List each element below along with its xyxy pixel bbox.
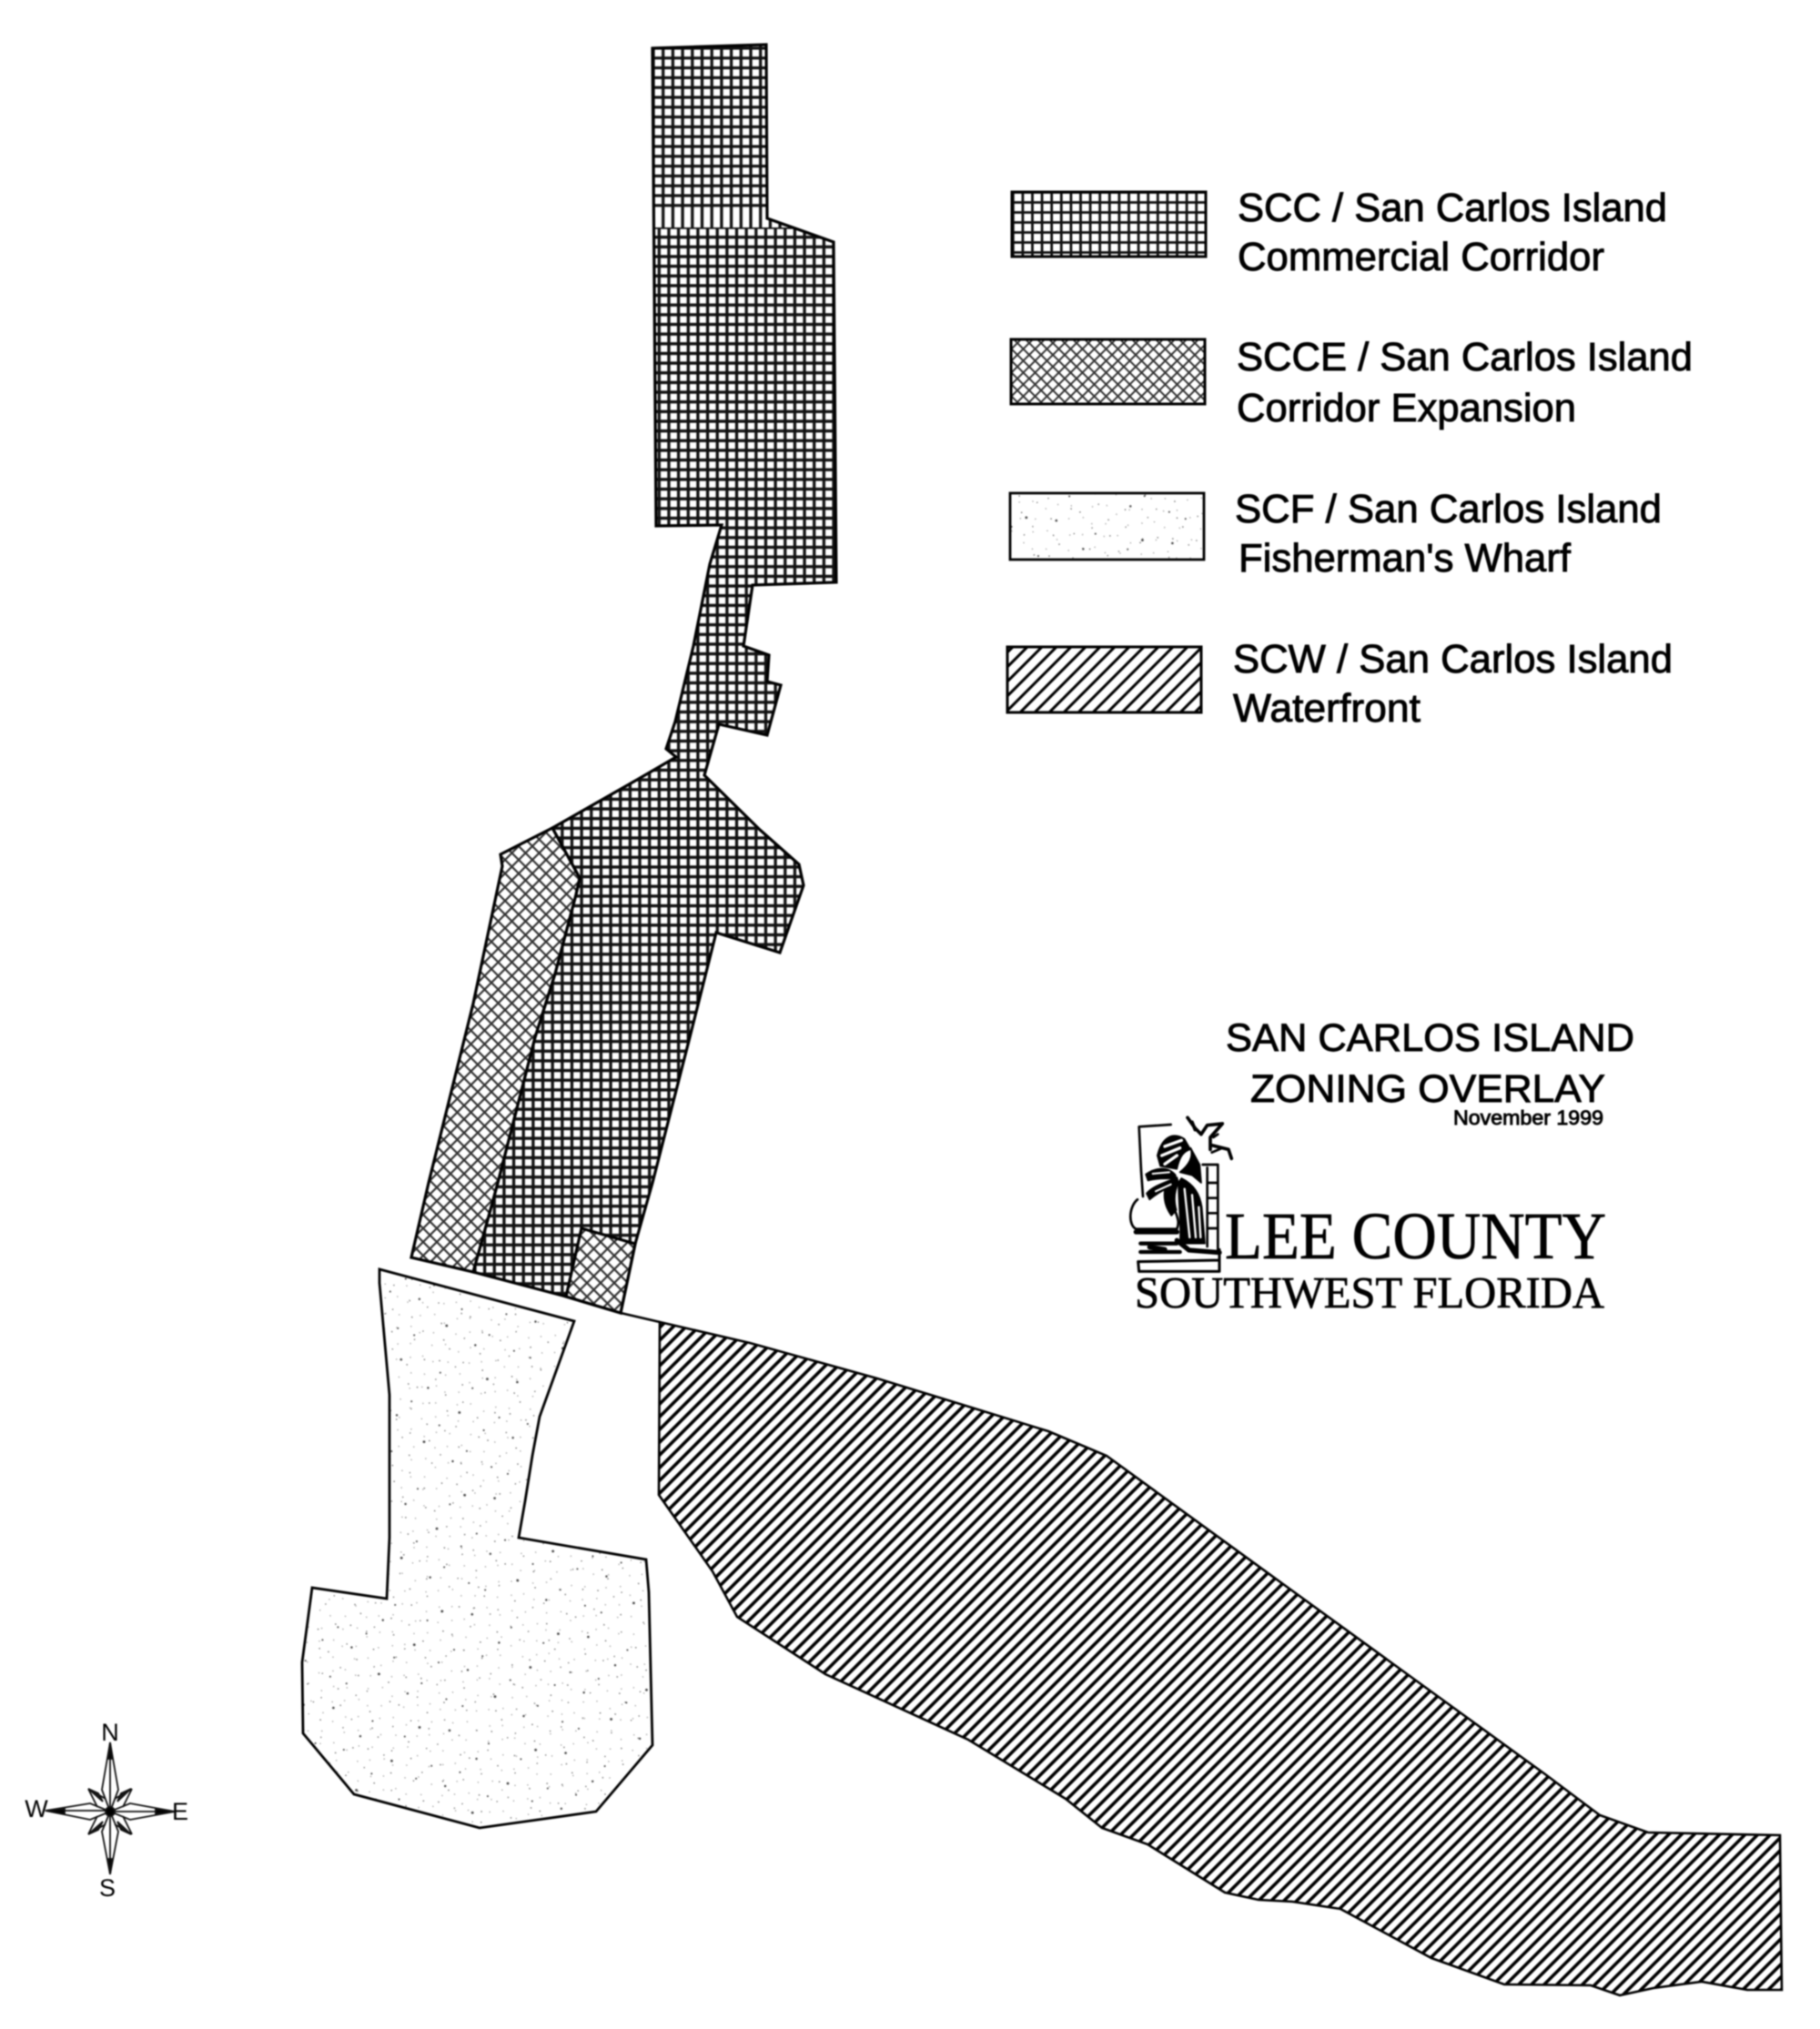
legend item: SCCE: Corridor Expansion [1237,387,1576,430]
icon: north arrow compass rose [25,1719,188,1902]
legend item: SCF [1010,488,1662,580]
legend item: SCF: Fisherman's Wharf [1239,537,1572,580]
legend item: SCC [1012,187,1667,279]
legend item: SCCE: SCCE / San Carlos Island [1237,336,1693,379]
title: SAN CARLOS ISLAND [1226,1016,1634,1060]
legend item: SCC: SCC / San Carlos Island [1238,187,1667,230]
legend item: SCC: Commercial Corridor [1238,236,1604,279]
title: ZONING OVERLAY [1250,1067,1605,1111]
map: SCW waterfront zone [621,1313,1782,1995]
icon: north arrow compass rose: W [25,1795,48,1822]
map: SCF Fisherman's Wharf zone [302,1269,652,1828]
legend [1007,187,1693,731]
title [1226,1016,1634,1111]
map: SCC commercial corridor zone [455,36,855,1319]
icon: north arrow compass rose: N [101,1719,119,1746]
legend item: SCW [1007,638,1673,731]
date: November 1999 [1453,1106,1603,1129]
icon: north arrow compass rose: E [172,1798,188,1825]
icon: Lee County palm tree logo [1130,1117,1231,1271]
icon: north arrow compass rose: S [99,1874,116,1902]
legend item: SCCE [1011,336,1693,430]
legend item: SCW: SCW / San Carlos Island [1233,638,1673,681]
logo wordmark: SOUTHWEST FLORIDA [1135,1267,1605,1317]
map: SCCE corridor expansion zone, small parcel [566,1228,635,1313]
logo wordmark: LEE COUNTY [1225,1199,1606,1273]
logo wordmark [1135,1199,1606,1317]
map: SCCE corridor expansion zone, west strip [411,828,580,1272]
legend item: SCF: SCF / San Carlos Island [1235,488,1662,531]
legend item: SCW: Waterfront [1233,687,1421,731]
